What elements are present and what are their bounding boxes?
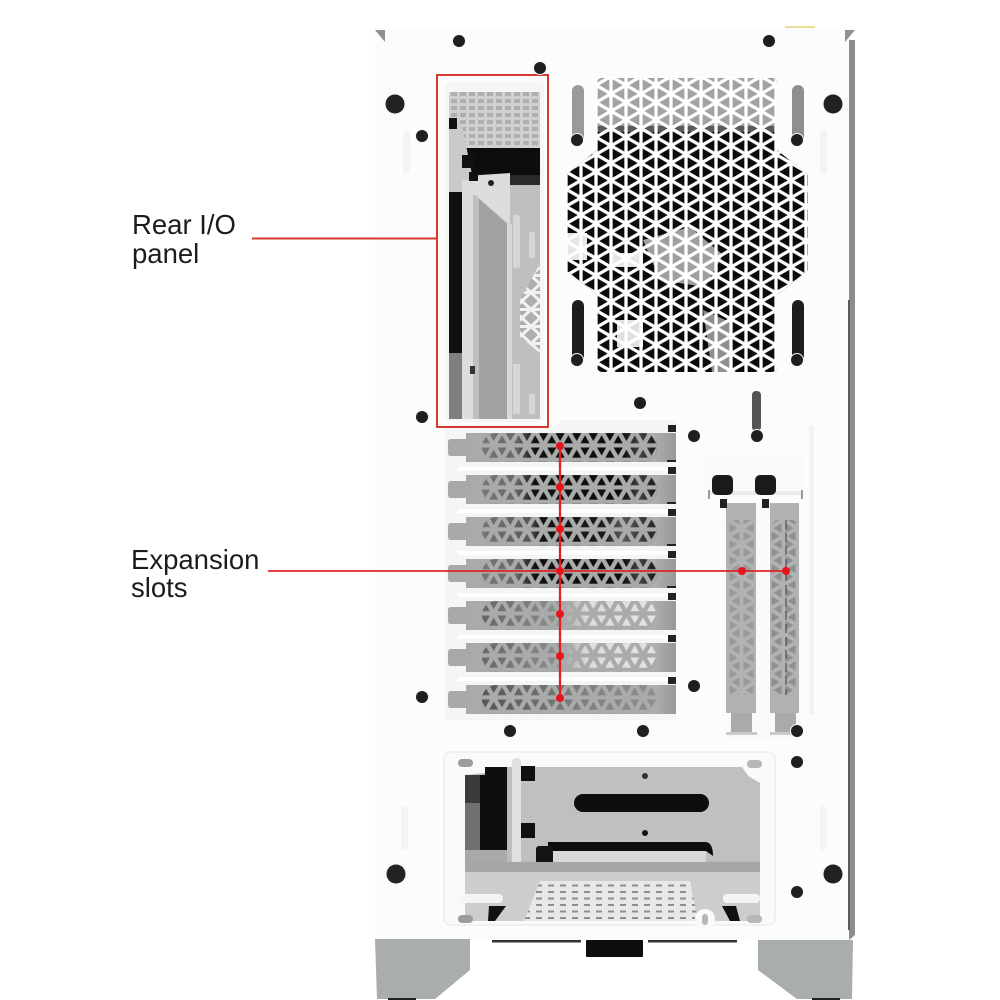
arrow: rear I/O leader line [252, 238, 437, 240]
callout: rear I/O panel label: Rear I/O [132, 209, 236, 240]
fan mounting slots [570, 85, 804, 367]
right vertical slot [762, 499, 801, 735]
callout: rear I/O panel label [132, 209, 236, 269]
PCIe slot 1 [448, 433, 676, 462]
left vertical slot [720, 499, 757, 735]
rear I/O opening [449, 92, 540, 419]
fan mesh vent [560, 70, 815, 380]
callout: expansion slots label [131, 544, 259, 603]
thumbscrews [712, 475, 776, 495]
callout: rear I/O panel label: panel [132, 238, 199, 269]
PCIe slot 4 [448, 559, 676, 588]
power supply bay [444, 752, 775, 929]
vertical GPU slots [705, 391, 805, 740]
PCIe slot 3 [448, 517, 676, 546]
callout: expansion slots label: Expansion [131, 544, 259, 575]
feet [375, 939, 853, 1000]
case rear panel [375, 26, 855, 940]
screws [384, 34, 844, 899]
PCIe slot 2 [448, 475, 676, 504]
PCIe slot 7 [448, 685, 676, 714]
PCIe slot 6 [448, 643, 676, 672]
callout: expansion slots label: slots [131, 572, 188, 603]
arrow: expansion slots leader lines [268, 442, 790, 702]
expansion slot bay [445, 420, 676, 720]
red box: rear I/O panel [437, 75, 548, 427]
PCIe slot 5 [448, 601, 676, 630]
